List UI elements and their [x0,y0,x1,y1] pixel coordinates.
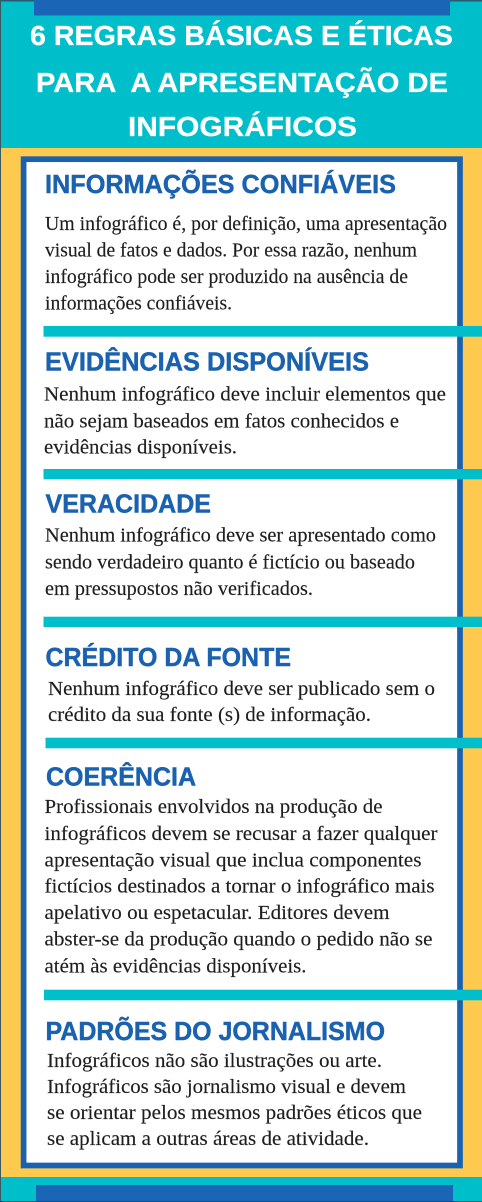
rule 3: veracidade [45,491,436,600]
text block: crédito da fonte: crédito da sua fonte (s) de informação. [48,704,371,726]
text block: padrões do jornalismo [47,1050,422,1150]
text block: coerência: apelativo ou espetacular. Editores devem [44,902,390,924]
divider bar 4 [46,738,482,748]
text block: veracidade: Nenhum infográfico deve ser apresentado como [45,525,436,547]
text block: padrões do jornalismo: Infográficos são jornalismo visual e devem [47,1076,406,1098]
heading: veracidade: VERACIDADE [46,491,211,519]
text block: coerência: Profissionais envolvidos na produção de [44,796,383,818]
heading: informações confiáveis: INFORMAÇÕES CONFIÁVEIS [45,169,396,199]
rule 1: informações confiáveis [45,169,447,314]
title: 6 REGRAS BÁSICAS E ÉTICAS [30,20,453,51]
text block: veracidade: sendo verdadeiro quanto é fictício ou baseado [45,551,415,573]
text block: padrões do jornalismo: se orientar pelos mesmos padrões éticos que [47,1102,422,1124]
text block: veracidade [45,525,436,600]
divider bar 1 [44,326,482,337]
text block: veracidade: em pressupostos não verificados. [45,578,313,600]
text block: crédito da fonte [48,678,435,726]
text block: informações confiáveis: infográfico pode ser produzido na ausência de [45,266,408,288]
text block: coerência [44,796,438,977]
footer band [0,1177,482,1202]
title [30,20,453,142]
text block: coerência: abster-se da produção quando o pedido não se [44,929,433,951]
heading: coerência: COERÊNCIA [46,762,196,792]
heading: crédito da fonte: CRÉDITO DA FONTE [46,643,291,672]
text block: evidências disponíveis: evidências disponíveis. [44,436,237,458]
title: PARA A APRESENTAÇÃO DE [36,67,448,98]
text block: coerência: apresentação visual que inclua componentes [44,850,422,872]
title: INFOGRÁFICOS [128,111,357,142]
rule 6: padrões do jornalismo [46,1016,422,1150]
rule 5: coerência [44,762,438,977]
text block: evidências disponíveis: Nenhum infográfico deve incluir elementos que [44,384,446,406]
main content panel [24,159,460,1165]
left edge line [0,0,1,1202]
text block: crédito da fonte: Nenhum infográfico deve ser publicado sem o [48,678,435,700]
text block: informações confiáveis [45,213,447,314]
rule 4: crédito da fonte [46,643,435,726]
text block: coerência: fictícios destinados a tornar o infográfico mais [44,876,435,898]
text block: evidências disponíveis [44,384,446,458]
text block: padrões do jornalismo: se aplicam a outras áreas de atividade. [47,1128,369,1150]
text block: informações confiáveis: Um infográfico é, por definição, uma apresentação [45,213,447,235]
divider bar 3 [44,617,482,627]
header band [0,0,482,148]
text block: informações confiáveis: informações confiáveis. [45,292,232,314]
heading: evidências disponíveis: EVIDÊNCIAS DISPONÍVEIS [45,347,369,377]
text block: coerência: atém às evidências disponíveis. [44,955,306,977]
divider bar 5 [44,990,482,1000]
heading: padrões do jornalismo: PADRÕES DO JORNALISMO [46,1016,385,1046]
text block: padrões do jornalismo: Infográficos não são ilustrações ou arte. [47,1050,382,1072]
text block: evidências disponíveis: não sejam baseados em fatos conhecidos e [44,410,399,432]
rule 2: evidências disponíveis [44,347,446,458]
text block: coerência: infográficos devem se recusar a fazer qualquer [44,823,438,845]
divider bar 2 [44,469,482,479]
text block: informações confiáveis: visual de fatos e dados. Por essa razão, nenhum [45,240,417,262]
